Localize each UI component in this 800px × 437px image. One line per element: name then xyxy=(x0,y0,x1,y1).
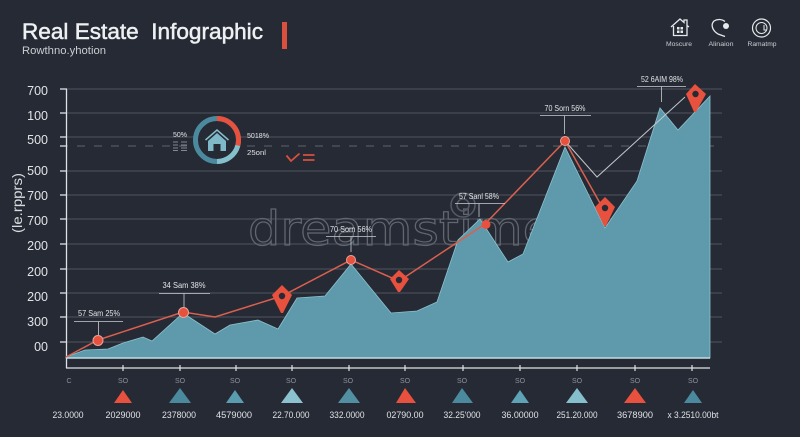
title: Real Estate Infographic xyxy=(22,19,263,44)
donut left label xyxy=(173,130,187,150)
y axis labels: 100 xyxy=(27,109,48,123)
y axis labels: 300 xyxy=(27,315,48,329)
data point: 57 Sam 25%: 57 Sam 25% xyxy=(78,309,120,318)
x axis tick labels: SO xyxy=(286,378,297,385)
icon: house xyxy=(206,130,228,151)
x axis values: 22.70.000 xyxy=(272,410,310,421)
y axis labels: 200 xyxy=(27,265,48,279)
data point: 34 Sam 38% xyxy=(159,281,210,318)
map pin 4 xyxy=(686,84,706,112)
data point: 70 Sorn 56%: 70 Sorn 56% xyxy=(330,225,372,234)
x axis tick labels: SO xyxy=(118,378,129,385)
x axis tick labels: SO xyxy=(400,378,411,385)
y axis title: (le.rpprs) xyxy=(10,173,25,233)
y axis labels: 00 xyxy=(34,340,48,354)
x axis values: 4579000 xyxy=(216,410,252,421)
x axis values xyxy=(52,410,719,421)
x axis values: 32.25'000 xyxy=(444,410,480,421)
x axis values: 2378000 xyxy=(162,410,196,421)
grid lines xyxy=(60,89,722,342)
title accent bar xyxy=(282,22,287,49)
y axis labels: 200 xyxy=(27,290,48,304)
x axis tick labels xyxy=(66,378,699,385)
x axis tick labels: SO xyxy=(230,378,241,385)
x axis values: 332.0000 xyxy=(330,410,364,421)
y axis labels xyxy=(27,84,48,354)
icon: house with label xyxy=(666,19,692,48)
donut left label: 50% xyxy=(173,130,187,139)
data point: 52 6AIM 98% xyxy=(637,75,686,102)
data point: 70 Sorn 56% upper: 70 Sorn 56% xyxy=(544,104,586,113)
data point: 57 Sam 58% xyxy=(455,192,505,229)
y axis labels: 700 xyxy=(27,214,48,228)
data point: 70 Sorn 56% upper xyxy=(540,104,591,146)
x axis tick labels: SO xyxy=(630,378,641,385)
donut right labels xyxy=(247,131,269,157)
donut chart with house xyxy=(196,118,239,162)
data point: 34 Sam 38%: 34 Sam 38% xyxy=(162,281,206,290)
donut right labels: 5018% xyxy=(247,131,269,140)
x axis tick labels: SO xyxy=(457,378,468,385)
y axis labels: 700 xyxy=(27,189,48,203)
x axis values: 23.0000 xyxy=(52,410,84,421)
check and equals symbols xyxy=(286,154,314,161)
x axis tick labels: SO xyxy=(343,378,354,385)
triangle markers xyxy=(114,388,702,403)
map pin 1 xyxy=(272,285,292,313)
area baseline xyxy=(66,357,710,359)
x axis values: 2029000 xyxy=(106,410,140,421)
x axis values: x 3.2510.00bt xyxy=(668,410,719,421)
x axis tick labels: SO xyxy=(572,378,583,385)
watermark logo xyxy=(451,193,475,217)
icon: house with label: Moscure xyxy=(666,41,692,48)
x axis xyxy=(66,365,710,371)
x axis tick labels: C xyxy=(66,378,72,385)
x axis tick labels: SO xyxy=(688,378,699,385)
area chart xyxy=(66,96,710,358)
data point: 52 6AIM 98%: 52 6AIM 98% xyxy=(641,75,683,84)
y axis labels: 500 xyxy=(27,133,48,147)
icon: at sign circle with label xyxy=(748,19,777,48)
data point: 57 Sam 58%: 57 Sanl 58% xyxy=(459,192,499,201)
map pin 3 xyxy=(595,197,615,226)
watermark: dreamstime xyxy=(248,202,554,257)
data point: 70 Sorn 56% xyxy=(326,225,376,264)
subtitle: Rowthno.yhotion xyxy=(22,45,106,57)
map pin 2 xyxy=(390,270,409,292)
y axis labels: 200 xyxy=(27,239,48,253)
icon: orbit with label: Alinaion xyxy=(708,41,734,48)
x axis values: 3678900 xyxy=(617,410,653,421)
icon: orbit with label xyxy=(708,19,734,48)
x axis values: 36.00000 xyxy=(502,410,538,421)
y axis labels: 500 xyxy=(27,164,48,178)
trend lines xyxy=(66,97,685,357)
icon: at sign circle with label: Ramatmp xyxy=(748,41,777,48)
donut right labels: 25onl xyxy=(247,148,266,157)
data point: 57 Sam 25% xyxy=(74,309,123,346)
x axis values: 251.20.000 xyxy=(556,410,598,421)
y axis xyxy=(60,89,67,368)
x axis tick labels: SO xyxy=(515,378,526,385)
y axis labels: 700 xyxy=(27,84,48,98)
x axis values: 02790.00 xyxy=(386,410,424,421)
x axis tick labels: SO xyxy=(175,378,186,385)
